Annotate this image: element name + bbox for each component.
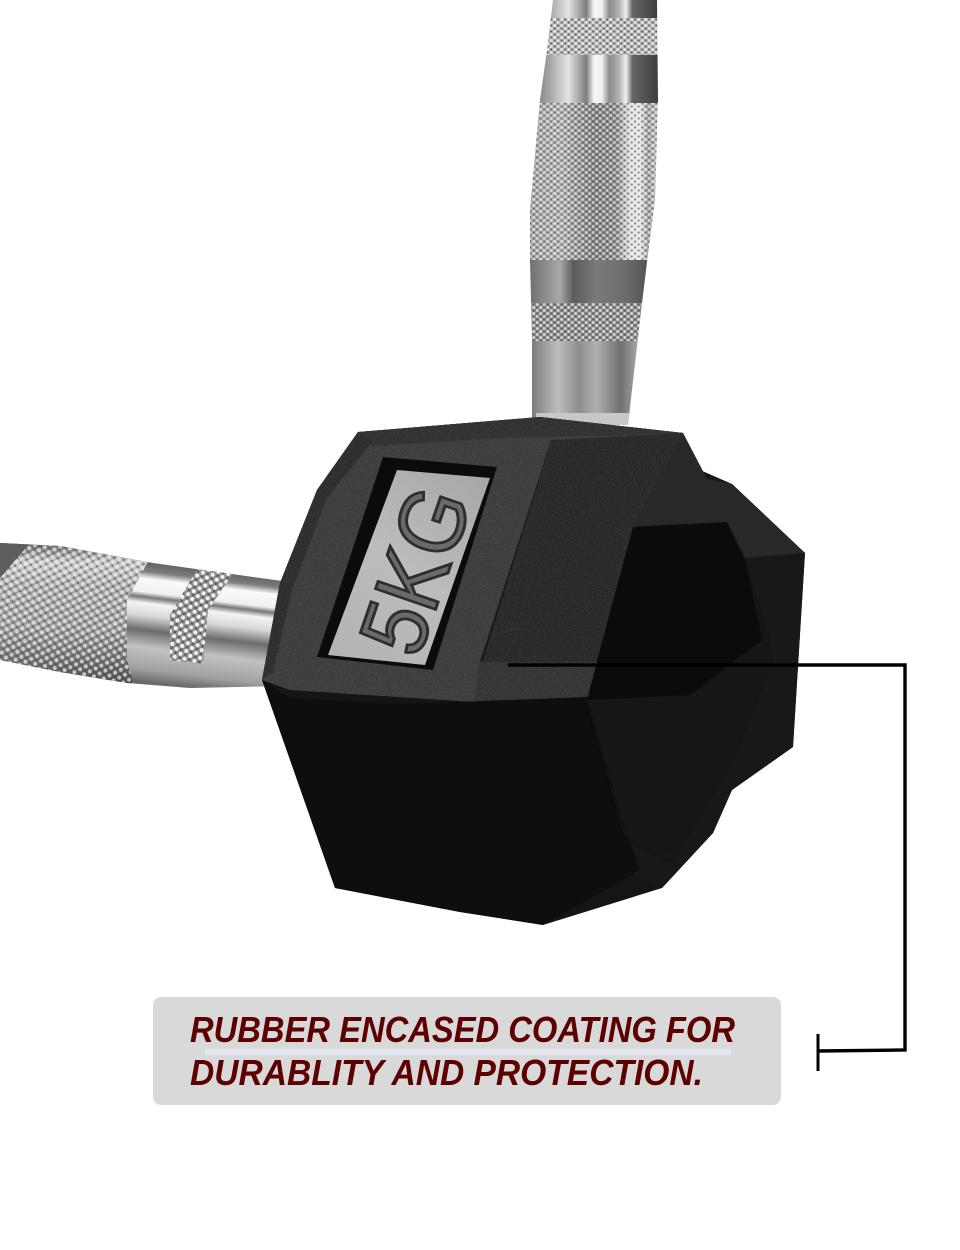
rubber grain [262, 417, 683, 702]
lower dark face [262, 680, 640, 925]
callout text: RUBBER ENCASED COATING FOR [190, 1009, 735, 1050]
side dark face [587, 522, 762, 700]
highlight strip [205, 1049, 731, 1055]
lower lit strip [474, 662, 600, 702]
left bevel [262, 432, 372, 680]
rubber hex head [262, 417, 805, 925]
callout box [153, 997, 781, 1105]
mid shaded face [587, 640, 770, 860]
horizontal chrome handle [0, 540, 290, 690]
top rim [358, 417, 683, 446]
vertical chrome handle [525, 0, 665, 426]
dumbbell photo illustration [0, 0, 805, 925]
weight plate [328, 470, 490, 665]
weight plate recess [317, 457, 497, 670]
head silhouette [262, 417, 805, 925]
outer collar face [600, 470, 805, 888]
upper right face [470, 417, 805, 702]
weight label: 5KG [340, 474, 492, 667]
callout leader line [508, 665, 905, 1071]
lit front face [262, 417, 683, 702]
callout text: DURABLITY AND PROTECTION. [190, 1052, 703, 1093]
